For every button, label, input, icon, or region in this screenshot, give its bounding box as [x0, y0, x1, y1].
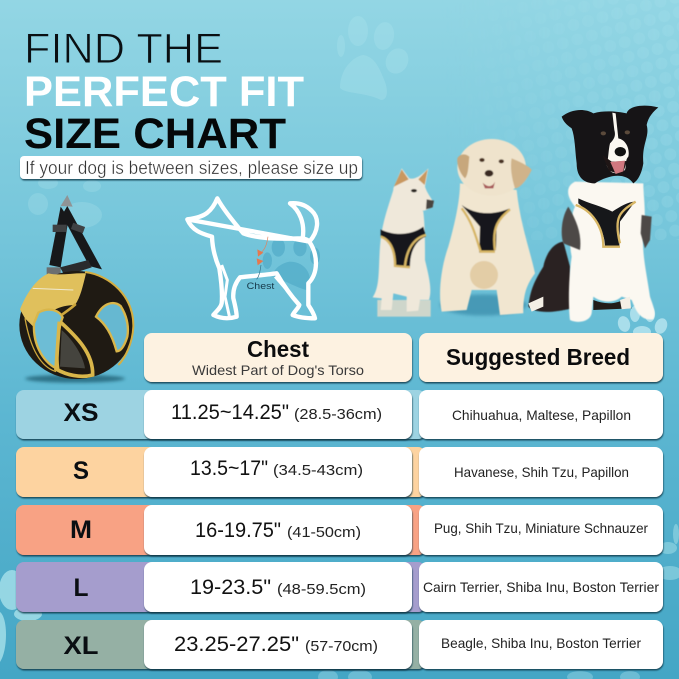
hind body — [528, 242, 572, 312]
outline — [187, 198, 317, 318]
table: header suggested breed: Suggested Breed — [446, 344, 630, 370]
dog outline diagram — [187, 198, 320, 318]
table: header suggested breed — [419, 333, 663, 382]
row XS: Chihuahua, Maltese, Papillon — [452, 407, 631, 423]
row M — [16, 505, 663, 555]
paw in dog — [263, 238, 320, 290]
collie harness — [576, 198, 636, 247]
row XL: (57-70cm) — [305, 638, 378, 655]
row XL: Beagle, Shiba Inu, Boston Terrier — [441, 635, 641, 651]
row S: 13.5~17" — [190, 457, 268, 480]
face blaze — [607, 113, 629, 173]
row M: 16-19.75" — [195, 519, 281, 542]
decorative paw bottom left — [0, 570, 42, 662]
row S — [16, 447, 663, 497]
decorative paw near collie — [616, 306, 669, 338]
row XS: 11.25~14.25" — [171, 401, 289, 424]
chest arrows — [257, 237, 268, 279]
row L: L — [74, 574, 88, 602]
front strap trim — [56, 322, 93, 376]
row L: (48-59.5cm) — [277, 581, 366, 598]
row XL: XL — [64, 632, 98, 660]
table: header chest — [144, 333, 412, 382]
floor shadows — [377, 294, 527, 317]
row XL — [16, 620, 663, 669]
row XL: 23.25-27.25" — [174, 633, 299, 656]
decorative paw right — [658, 524, 679, 580]
row XS: XS — [64, 399, 98, 427]
title line: find the: FIND THE — [24, 25, 223, 73]
face features — [601, 130, 630, 175]
head — [562, 106, 658, 183]
title line: size chart: SIZE CHART — [24, 110, 286, 158]
dark between legs — [593, 298, 632, 310]
chest label: Chest — [247, 281, 275, 291]
shiba dog — [373, 168, 434, 312]
grey flank patches — [562, 207, 652, 250]
row L: 19-23.5" — [190, 576, 271, 599]
decorative paw bottom — [318, 670, 640, 679]
collie dog — [528, 106, 658, 322]
table: header chest: Chest — [247, 336, 309, 362]
row S: S — [73, 457, 89, 485]
row L: Cairn Terrier, Shiba Inu, Boston Terrier — [423, 579, 659, 595]
row XS — [16, 390, 663, 439]
dogs photo: shiba and poodle — [373, 139, 535, 317]
harness windows — [34, 310, 63, 369]
yellow panel — [20, 273, 86, 327]
row S: Havanese, Shih Tzu, Papillon — [454, 464, 629, 480]
table: header chest: Widest Part of Dog's Torso — [192, 362, 364, 378]
poodle dog — [440, 139, 535, 315]
row S: (34.5-43cm) — [273, 462, 363, 479]
mesh panel — [60, 330, 85, 368]
row XS: (28.5-36cm) — [294, 406, 382, 423]
white torso and legs — [568, 182, 655, 322]
decorative paw top — [337, 16, 412, 100]
harness body — [19, 271, 134, 379]
row L — [16, 562, 663, 612]
title line: perfect fit: PERFECT FIT — [24, 68, 304, 116]
hind feet — [528, 297, 631, 312]
row M: Pug, Shih Tzu, Miniature Schnauzer — [434, 520, 648, 536]
row M: (41-50cm) — [287, 524, 361, 541]
harness product photo — [19, 195, 134, 383]
note pill: If your dog is between sizes, please size up — [25, 158, 358, 178]
row M: M — [70, 516, 92, 544]
decorative paw behind harness — [28, 177, 102, 228]
harness straps — [47, 195, 102, 281]
